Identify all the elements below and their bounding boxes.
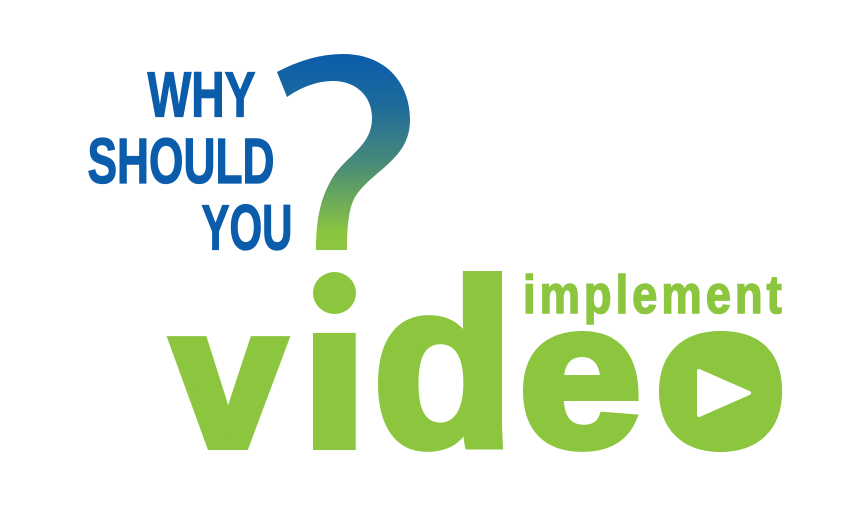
letter: i with round dot — [312, 272, 356, 450]
letter: o with play button: o — [650, 249, 791, 497]
icon: gradient question mark — [277, 54, 410, 250]
letter: d: d — [372, 232, 515, 496]
heading: why should you — [88, 58, 292, 264]
letter: v: v — [173, 267, 284, 488]
letter: e: e — [519, 261, 642, 490]
letter: i with round dot: i — [291, 250, 378, 498]
wordmark: video — [166, 271, 782, 452]
text: YOU: YOU — [202, 192, 292, 264]
text: implement: implement — [523, 264, 782, 325]
text: WHY: WHY — [148, 58, 256, 130]
text: SHOULD: SHOULD — [88, 125, 274, 197]
